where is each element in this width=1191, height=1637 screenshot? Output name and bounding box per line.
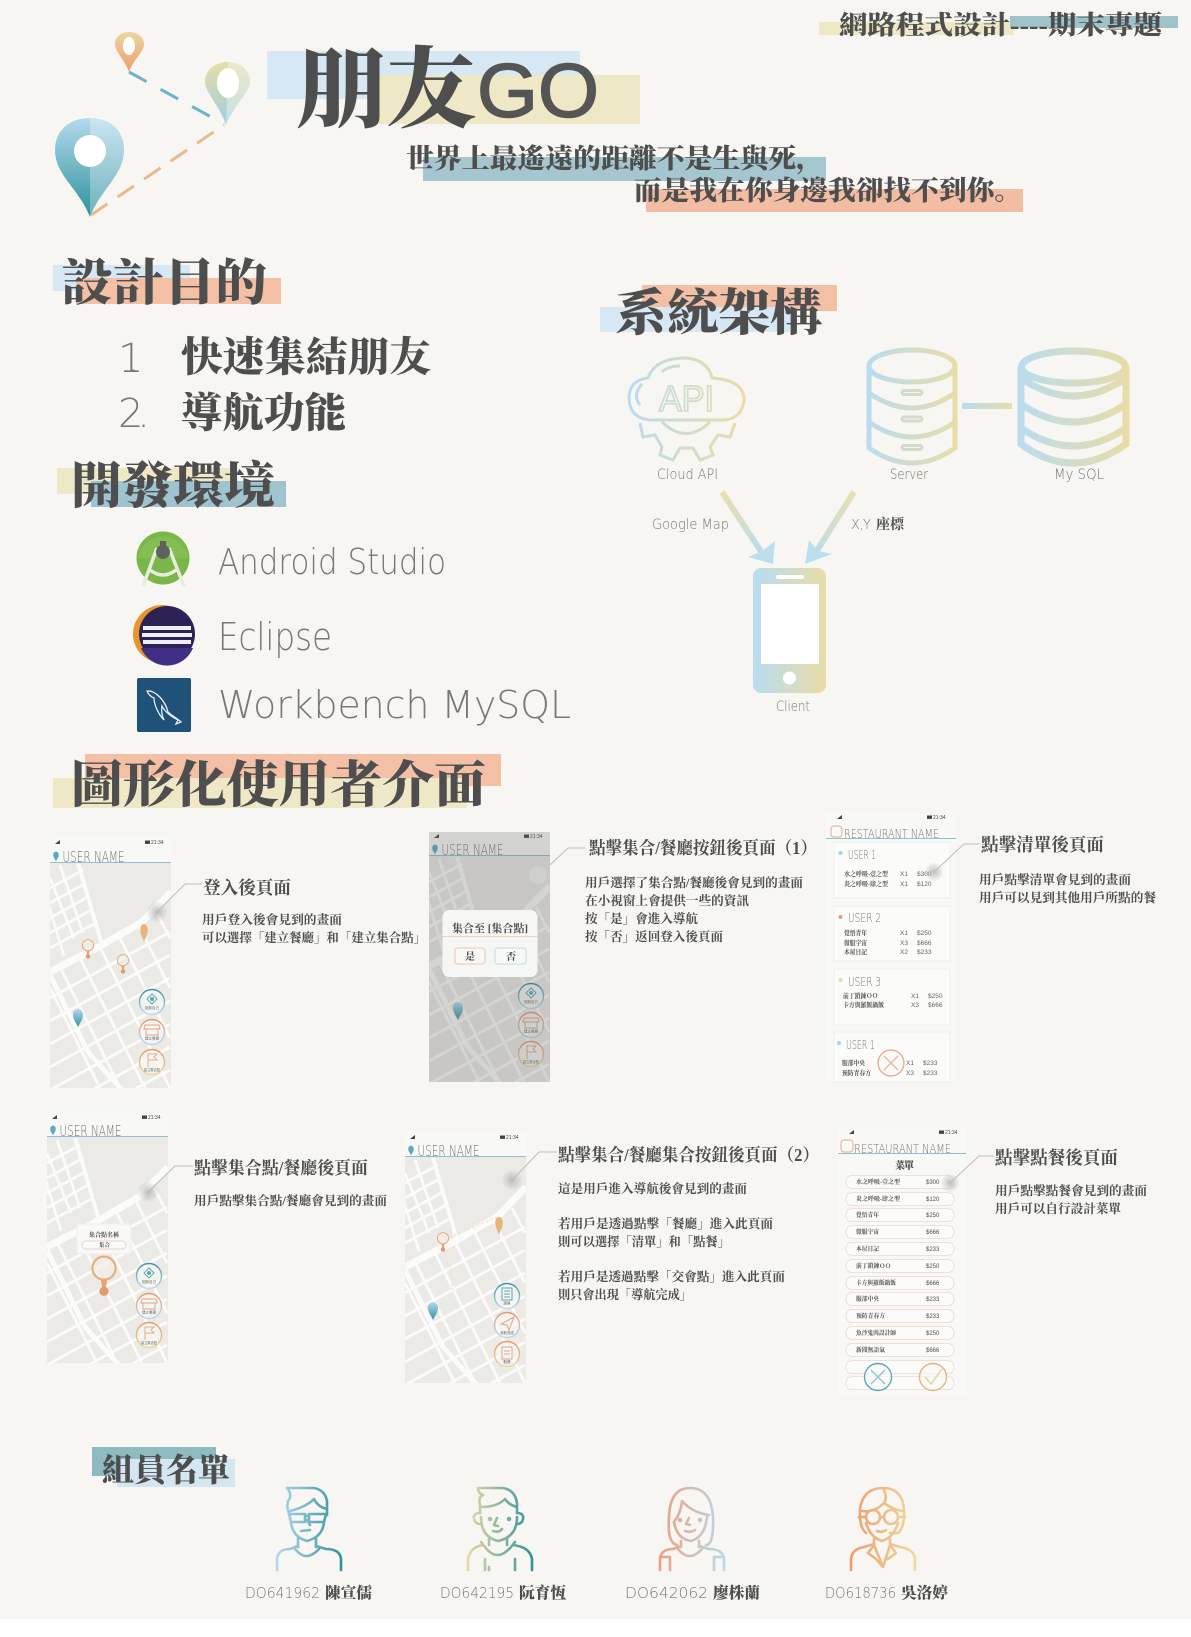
caption: screen 2: 點擊集合/餐廳按鈕後頁面（1） xyxy=(589,838,817,858)
icon: MySQL database xyxy=(1021,351,1126,463)
caption: screen 2 xyxy=(585,838,817,944)
screen 6: menu xyxy=(838,1128,966,1395)
heading: graphical user interface: 圖形化使用者介面 xyxy=(71,757,486,813)
order card: user 2: 微服宇宙 xyxy=(844,938,867,947)
caption: screen 5: 點擊集合/餐廳集合按鈕後頁面（2） xyxy=(558,1145,819,1165)
caption: screen 6: 點擊點餐後頁面 xyxy=(995,1147,1118,1168)
caption: screen 3: 用戶可以見到其他用戶所點的餐 xyxy=(979,890,1156,905)
screen 3: order list: RESTAURANT NAME xyxy=(844,827,939,841)
subtitle quote xyxy=(406,143,1023,212)
caption: screen 4: 點擊集合點/餐廳後頁面 xyxy=(194,1158,368,1178)
order card: user 2: X3 xyxy=(900,940,908,947)
person 2 label: DO642195 xyxy=(440,1584,514,1602)
order card: user 2: USER 2 xyxy=(848,911,881,925)
order card: user 1 repeat: $233 xyxy=(923,1070,938,1077)
order card: user 2 xyxy=(834,906,950,961)
X, Y coordinates label: X , Y xyxy=(851,518,871,533)
icon: server database xyxy=(869,350,955,463)
menu rows: $233 xyxy=(926,1297,940,1303)
person 1 label: DO641962 xyxy=(245,1584,320,1602)
menu rows: 水之呼吸-壹之型 xyxy=(856,1178,900,1186)
screen 6: menu: 菜單 xyxy=(895,1159,914,1172)
order card: user 1 repeat: X1 xyxy=(906,1060,914,1067)
menu rows: 预防青春方 xyxy=(856,1312,885,1320)
order card: user 1: X1 xyxy=(900,871,908,878)
order card: user 3: X3 xyxy=(911,1002,919,1009)
order card: user 3: USER 3 xyxy=(848,975,881,989)
heading: team members: 組員名單 xyxy=(102,1452,230,1488)
caption: screen 1: 用戶登入後會見到的畫面 xyxy=(202,912,342,927)
order card: user 1 repeat: USER 1 xyxy=(846,1038,875,1052)
caption: screen 4: 用戶點擊集合點/餐廳會見到的畫面 xyxy=(194,1193,387,1208)
order card: user 1: $120 xyxy=(917,881,932,888)
Eclipse label: Eclipse xyxy=(218,615,332,659)
design goals list: 1. xyxy=(118,336,143,382)
menu rows: $666 xyxy=(926,1281,940,1287)
person 2 xyxy=(468,1488,532,1570)
order card: user 1: USER 1 xyxy=(848,848,876,862)
popup: 集合 xyxy=(99,1241,111,1249)
caption: screen 3: 點擊清單後頁面 xyxy=(981,834,1104,855)
Android Studio label: Android Studio xyxy=(218,542,446,583)
callout: screen 2 xyxy=(550,848,585,865)
order card: user 2: $666 xyxy=(917,940,932,947)
icon: cloud API: API xyxy=(659,378,714,419)
dialog xyxy=(442,910,538,977)
X, Y coordinates label: 座標 xyxy=(876,516,905,533)
popup: 集合點名稱 xyxy=(89,1231,119,1239)
person 2 label xyxy=(440,1583,566,1602)
icon: MySQL Workbench xyxy=(137,678,191,732)
menu rows: $300 xyxy=(926,1180,940,1186)
design goals list: 導航功能 xyxy=(181,390,346,436)
menu rows: $250 xyxy=(926,1331,940,1337)
menu rows: $120 xyxy=(926,1197,940,1203)
Workbench MySQL label: Workbench MySQL xyxy=(218,683,571,727)
Google Map label: Google Map xyxy=(652,517,729,533)
menu rows: $233 xyxy=(926,1247,940,1253)
person 3 label: DO642062 xyxy=(625,1584,708,1602)
menu rows: $666 xyxy=(926,1230,940,1236)
menu rows: 覺悟青年 xyxy=(855,1211,879,1219)
person 4 label: DO618736 xyxy=(825,1584,896,1602)
heading: dev environment: 開發環境 xyxy=(71,458,275,514)
callout: screen 6 xyxy=(950,1156,994,1183)
Client label: Client xyxy=(776,699,810,715)
architecture diagram xyxy=(629,350,1126,715)
heading: system architecture: 系統架構 xyxy=(615,285,822,341)
screen 5: navigation: USER NAME xyxy=(418,1142,480,1160)
callout: screen 3 xyxy=(934,844,979,872)
design goals list: 快速集結朋友 xyxy=(181,334,431,380)
icon: Eclipse xyxy=(133,605,195,666)
icon: map pins with dashed route xyxy=(55,32,250,217)
order card: user 2: X2 xyxy=(900,949,908,956)
callout: screen 1 xyxy=(157,884,202,912)
subtitle quote: 而是我在你身邊我卻找不到你。 xyxy=(634,175,1022,206)
menu rows: 本屋日記 xyxy=(856,1245,879,1253)
menu rows: 微服宇宙 xyxy=(856,1228,879,1236)
caption: screen 6: 用戶點擊點餐會見到的畫面 xyxy=(995,1183,1147,1198)
order card: user 1: 炎之呼吸-肆之型 xyxy=(844,879,888,888)
dialog: 集合至 [集合點] xyxy=(452,921,528,935)
order card: user 1 repeat: X3 xyxy=(906,1070,914,1077)
order card: user 1 repeat xyxy=(834,1032,950,1082)
menu rows xyxy=(846,1176,954,1390)
caption: screen 1: 登入後頁面 xyxy=(203,877,291,898)
callout: screen 4 xyxy=(148,1166,193,1192)
order card: user 1: $300 xyxy=(917,871,932,878)
screen 4: meeting point popup: USER NAME xyxy=(60,1122,122,1140)
arrow: coordinates xyxy=(805,492,854,564)
title xyxy=(267,43,640,140)
order card: user 3: 前丁鎖鍊ＯＯ xyxy=(843,991,878,1000)
caption: screen 3 xyxy=(979,834,1156,905)
order card: user 2: 本屋日記 xyxy=(844,947,867,956)
menu rows: 炎之呼吸-肆之型 xyxy=(856,1195,900,1203)
menu rows: 卡方與羅飯鍋飯 xyxy=(856,1279,896,1287)
caption: screen 5: 若用戶是透過點擊「餐廳」進入此頁面 xyxy=(558,1216,773,1231)
menu rows: $250 xyxy=(926,1213,940,1219)
cancel button xyxy=(864,1364,892,1390)
order card: user 3: $250 xyxy=(928,993,943,1000)
caption: screen 1: 可以選擇「建立餐廳」和「建立集合點」 xyxy=(202,930,426,945)
title: 朋友 xyxy=(296,43,476,140)
screen 3: order list xyxy=(826,813,956,1082)
caption: screen 2: 按「否」返回登入後頁面 xyxy=(585,929,723,944)
person 2 label: 阮育恆 xyxy=(519,1583,566,1602)
order card: user 3: $666 xyxy=(928,1002,943,1009)
person 4 label: 吳洛婷 xyxy=(901,1583,948,1602)
menu rows: 前丁鎖鍊ＯＯ xyxy=(856,1262,891,1270)
arrow: Google Map xyxy=(722,492,775,564)
caption: screen 5 xyxy=(558,1145,819,1302)
design goals list: 2. xyxy=(118,391,150,437)
icon: cloud API xyxy=(629,358,744,460)
icon: client phone xyxy=(753,568,826,693)
person 1 xyxy=(277,1488,341,1570)
order card: user 1 repeat: $233 xyxy=(923,1060,938,1067)
close button xyxy=(878,1050,904,1076)
screen 5: navigation xyxy=(403,1133,526,1386)
X, Y coordinates label xyxy=(851,516,905,533)
caption: screen 5: 這是用戶進入導航後會見到的畫面 xyxy=(558,1181,747,1196)
screen 2: confirm dialog xyxy=(427,832,550,1085)
menu rows: 新聞無語氣 xyxy=(856,1346,885,1354)
subtitle quote: 世界上最遙遠的距離不是生與死， xyxy=(406,143,824,175)
person 4 xyxy=(851,1488,915,1570)
menu rows: 服部中央 xyxy=(856,1295,879,1303)
popup xyxy=(77,1224,131,1254)
person 3 label xyxy=(625,1583,760,1602)
caption: screen 3: 用戶點擊清單會見到的畫面 xyxy=(979,872,1131,887)
title: GO xyxy=(477,49,599,134)
person 1 label: 陳宣儒 xyxy=(325,1583,372,1602)
order card: user 3: 卡方與羅飯鍋飯 xyxy=(843,1000,884,1009)
design goals list xyxy=(118,334,431,437)
order card: user 1 repeat: 服部中央 xyxy=(842,1058,865,1067)
icon: Android Studio xyxy=(136,532,190,586)
caption: screen 1 xyxy=(202,877,426,945)
order card: user 3 xyxy=(834,969,950,1025)
order card: user 2: $233 xyxy=(917,949,932,956)
menu rows: $233 xyxy=(926,1314,940,1320)
person 3 label: 廖株蘭 xyxy=(713,1583,760,1602)
menu rows: $250 xyxy=(926,1264,940,1270)
heading: design goals: 設計目的 xyxy=(61,255,267,311)
order card: user 2: $250 xyxy=(917,930,932,937)
order card: user 1: 水之呼吸-壹之型 xyxy=(844,869,888,878)
confirm button xyxy=(920,1364,946,1390)
dialog: 是 xyxy=(465,950,475,963)
menu rows: $666 xyxy=(926,1348,940,1354)
person 1 label xyxy=(245,1583,372,1602)
order card: user 2: 覺悟青年 xyxy=(843,928,867,937)
My SQL label: My SQL xyxy=(1054,467,1104,483)
caption: screen 5: 則可以選擇「清單」和「點餐」 xyxy=(558,1234,730,1249)
order card: user 1 repeat: 预防青春方 xyxy=(842,1068,871,1077)
caption: screen 2: 用戶選擇了集合點/餐廳後會見到的畫面 xyxy=(585,875,803,890)
caption: screen 2: 在小視窗上會提供一些的資訊 xyxy=(585,893,749,908)
caption: screen 6 xyxy=(995,1147,1147,1216)
callout: screen 5 xyxy=(512,1152,557,1180)
course label: 網路程式設計----期末專題 xyxy=(839,10,1166,40)
order card: user 1 xyxy=(834,842,950,898)
dialog: 否 xyxy=(506,950,516,963)
caption: screen 5: 則只會出現「導航完成」 xyxy=(558,1287,692,1302)
caption: screen 5: 若用戶是透過點擊「交會點」進入此頁面 xyxy=(558,1269,785,1284)
screen 2: confirm dialog: USER NAME xyxy=(442,841,504,859)
order card: user 3: X1 xyxy=(911,993,919,1000)
caption: screen 2: 按「是」會進入導航 xyxy=(585,911,698,926)
screen 6: menu: RESTAURANT NAME xyxy=(854,1142,951,1156)
person 3 xyxy=(660,1488,724,1570)
menu rows: 魚沙鬼肉設計師 xyxy=(856,1329,896,1337)
order card: user 1: X1 xyxy=(900,881,908,888)
Cloud API label: Cloud API xyxy=(657,467,718,483)
person 4 label xyxy=(825,1583,948,1602)
order card: user 2: X1 xyxy=(900,930,908,937)
caption: screen 6: 用戶可以自行設計菜單 xyxy=(995,1201,1121,1216)
connector xyxy=(962,403,1012,409)
screen 4: meeting point popup xyxy=(45,1113,168,1366)
Server label: Server xyxy=(890,467,928,483)
screen 1: after login: USER NAME xyxy=(62,848,124,866)
caption: screen 4 xyxy=(194,1158,387,1208)
screen 1: after login xyxy=(48,838,171,1091)
